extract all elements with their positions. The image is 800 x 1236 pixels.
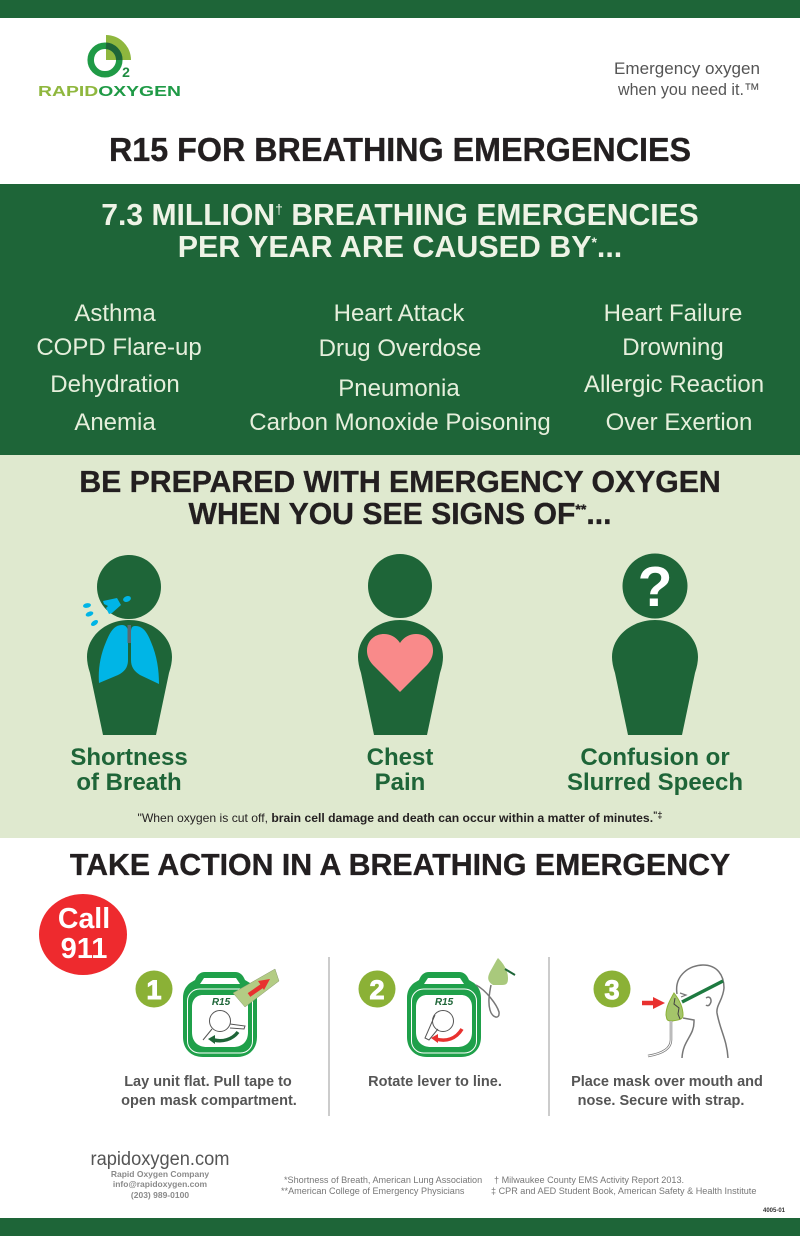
causes list: Pneumonia (338, 375, 460, 402)
icon: device rotate lever: R15 (435, 997, 454, 1008)
footer contact: rapidoxygen.com (90, 1149, 230, 1170)
step 2 caption: Rotate lever to line. (368, 1074, 502, 1090)
causes list: Carbon Monoxide Poisoning (249, 409, 551, 436)
step 1 caption: Lay unit flat. Pull tape to (124, 1074, 292, 1090)
signs heading: ** (575, 501, 587, 517)
icon: chest pain figure (358, 554, 443, 735)
signs heading (79, 466, 721, 531)
label: shortness of breath (70, 744, 188, 796)
causes list: Allergic Reaction (584, 371, 764, 398)
logo: Rapid Oxygen: RAPID OXYGEN (38, 84, 181, 100)
causes list: Drowning (622, 334, 724, 361)
title: R15 FOR BREATHING EMERGENCIES (109, 132, 691, 169)
signs heading: BE PREPARED WITH EMERGENCY OXYGEN (79, 466, 721, 499)
causes list: Asthma (74, 300, 156, 327)
quote: "When oxygen is cut off, brain cell damage and death can occur within a matter of minutes. (138, 811, 648, 825)
causes heading: PER YEAR ARE CAUSED BY (178, 230, 591, 264)
bottom band (0, 1218, 800, 1236)
causes heading (101, 199, 699, 264)
footnotes: † Milwaukee County EMS Activity Report 2013. (494, 1175, 684, 1185)
panel: signs (0, 455, 800, 838)
step 1 (121, 969, 297, 1109)
icon: confusion figure (612, 554, 698, 735)
causes list: Over Exertion (606, 409, 752, 436)
icon: shortness of breath figure (83, 555, 172, 735)
call 911 badge: 911 (61, 933, 107, 965)
footer contact: Rapid Oxygen Company (111, 1169, 209, 1179)
causes heading: BREATHING EMERGENCIES (283, 199, 699, 232)
footer contact (90, 1149, 230, 1200)
step 3 number (594, 970, 630, 1008)
footer contact: info@rapidoxygen.com (113, 1179, 208, 1189)
tagline (614, 59, 760, 99)
step 2 number (358, 970, 396, 1008)
step 1 number (136, 970, 172, 1008)
print code: 4005-01 (763, 1208, 786, 1214)
logo: Rapid Oxygen (38, 35, 181, 100)
label: chest pain: Chest (367, 744, 433, 771)
step 1 caption: open mask compartment. (121, 1093, 297, 1109)
label: confusion or slurred speech (567, 744, 743, 796)
causes heading: 7.3 MILLION (101, 199, 275, 232)
label: chest pain (367, 744, 433, 796)
footnotes: ‡ CPR and AED Student Book, American Safety & Health Institute (491, 1186, 756, 1196)
step 3 caption: Place mask over mouth and (571, 1074, 763, 1090)
causes list: Anemia (74, 409, 156, 436)
divider (548, 957, 550, 1116)
icon: confusion figure: ? (638, 555, 672, 619)
top band (0, 0, 800, 18)
causes list: Heart Attack (334, 300, 465, 327)
signs heading: ... (586, 498, 612, 531)
step 1 number: 1 (146, 975, 162, 1005)
footnotes (281, 1175, 756, 1196)
signs heading: WHEN YOU SEE SIGNS OF (188, 498, 575, 531)
label: chest pain: Pain (375, 769, 425, 796)
quote: "‡ (653, 810, 662, 820)
footnotes: *Shortness of Breath, American Lung Association (284, 1175, 482, 1185)
call 911 badge (39, 894, 127, 975)
icon: device pull tape: R15 (212, 997, 231, 1008)
label: confusion or slurred speech: Slurred Speech (567, 769, 743, 796)
causes list (36, 300, 764, 436)
step 2 number: 2 (369, 975, 385, 1005)
step 3 caption: nose. Secure with strap. (578, 1093, 744, 1109)
footer contact: (203) 989-0100 (131, 1190, 189, 1200)
step 3 number: 3 (604, 975, 620, 1005)
panel: causes (0, 184, 800, 455)
causes list: Drug Overdose (319, 335, 481, 362)
icon: device pull tape (183, 969, 279, 1057)
step 3 caption (571, 1074, 763, 1109)
step 3 (571, 965, 763, 1109)
label: shortness of breath: Shortness (70, 744, 188, 771)
label: shortness of breath: of Breath (76, 769, 182, 796)
causes list: Dehydration (50, 371, 180, 398)
tagline: Emergency oxygen (614, 59, 760, 78)
logo: Rapid Oxygen: 2 (122, 64, 130, 80)
causes heading: † (275, 201, 283, 217)
icon: mask on face (642, 965, 728, 1058)
tagline: when you need it.™ (617, 80, 760, 99)
label: confusion or slurred speech: Confusion or (580, 744, 730, 771)
footnotes: **American College of Emergency Physicians (281, 1186, 465, 1196)
causes list: Heart Failure (604, 300, 742, 327)
call 911 badge: Call (58, 903, 110, 935)
causes heading: * (591, 234, 597, 250)
step 1 caption (121, 1074, 297, 1109)
causes list: COPD Flare-up (36, 334, 202, 361)
icon: device rotate lever (407, 958, 515, 1057)
step 2 (358, 958, 515, 1090)
action heading: TAKE ACTION IN A BREATHING EMERGENCY (70, 849, 730, 882)
causes heading: ... (597, 230, 622, 264)
divider (328, 957, 330, 1116)
